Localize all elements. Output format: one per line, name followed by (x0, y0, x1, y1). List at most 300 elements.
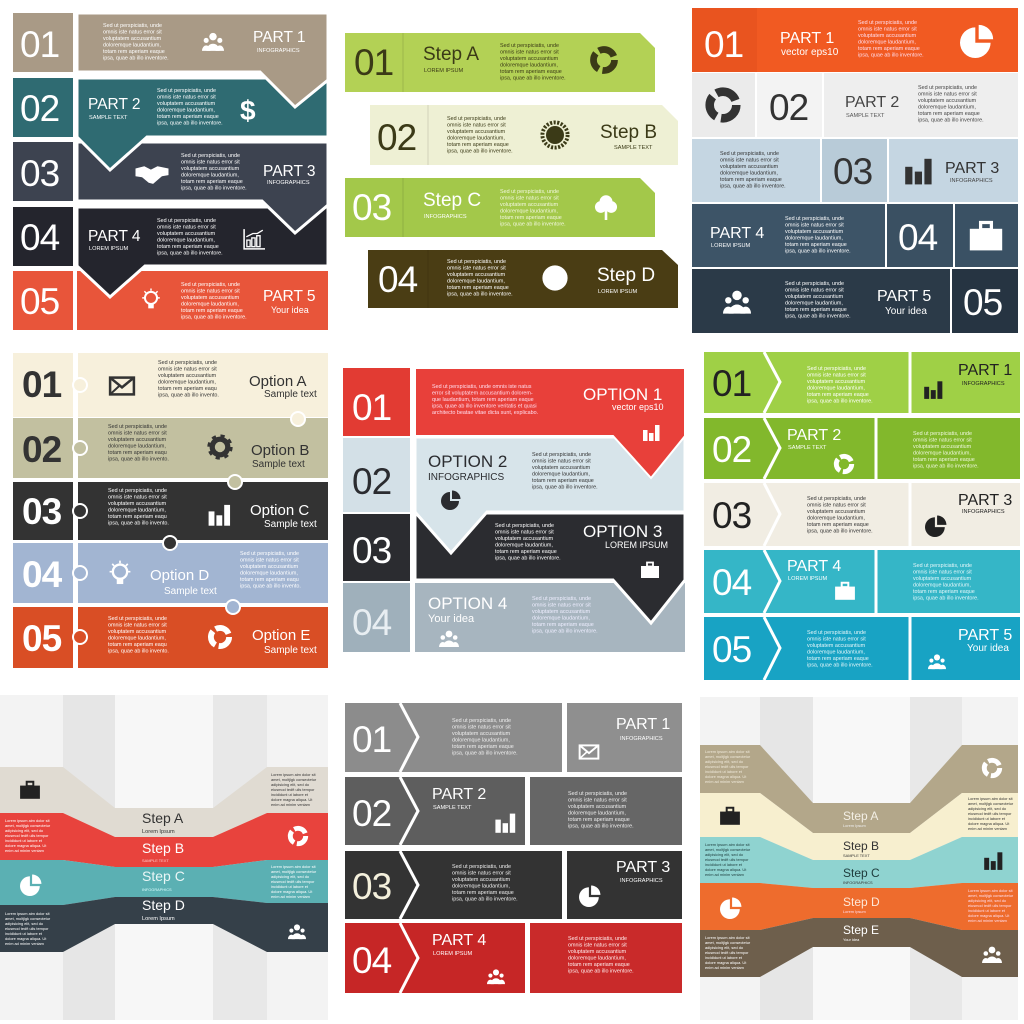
panel 1: parts 01-05 chevron rows: PART 1 (253, 29, 306, 46)
panel 2: steps A-D tags: doloremque laudantium, (447, 136, 505, 142)
panel 9: folded steps A-E: Lorem Ipsum (843, 909, 866, 914)
panel 8: gray parts 01-04: 02 (352, 793, 391, 834)
panel 6: chevron parts 01-05: doloremque laudantium, (913, 582, 971, 588)
panel 1: parts 01-05 chevron rows: totam rem aperiam eaque (157, 114, 219, 120)
panel 9: folded steps A-E: adipisicing elit, sed do (968, 806, 1006, 811)
panel 3: tiled parts grid: Sed ut perspiciatis, unde (918, 85, 977, 91)
panel 4: puzzle options A-E: doloremque laudantium, (108, 508, 166, 514)
panel 2: steps A-D tags: voluptatem accusantium (447, 129, 506, 135)
panel 4: puzzle options A-E: voluptatem accusantium (108, 629, 167, 635)
panel 2: steps A-D tags: Sed ut perspiciatis, unde (500, 43, 559, 49)
panel 3: tiled parts grid: ipsa, quae ab illo inventore. (858, 52, 924, 58)
panel 3: tiled parts grid: Sed ut perspiciatis, unde (858, 20, 917, 26)
panel 1: parts 01-05 chevron rows: totam rem aperiam eaque (181, 308, 243, 314)
panel 1: parts 01-05 chevron rows: Sed ut perspiciatis, unde (103, 23, 162, 29)
panel 2: steps A-D tags: doloremque laudantium, (500, 62, 558, 68)
panel 6: chevron parts 01-05: omnis iste natus error sit (913, 570, 972, 576)
panel 7: folded steps A-D: enim ad minim veniam (5, 941, 44, 946)
panel 5: options 1-4 with V notches (343, 368, 685, 652)
panel 7: folded steps A-D: adipisicing elit, sed do (5, 921, 43, 926)
panel 4: puzzle options A-E (13, 353, 328, 668)
panel 5: options 1-4 with V notches: doloremque laudantium, (532, 616, 590, 622)
panel 7: folded steps A-D: Step D (142, 897, 185, 913)
panel 2: steps A-D tags: omnis iste natus error sit (447, 266, 506, 272)
panel 6: chevron parts 01-05: voluptatem accusantium (807, 379, 866, 385)
panel 4: puzzle options A-E: voluptatem accusantium (240, 564, 299, 570)
panel 6: chevron parts 01-05: totam rem aperiam eaque (913, 589, 975, 595)
panel 4: puzzle options A-E: 03 (22, 491, 62, 532)
panel 3: tiled parts grid: PART 5 (877, 288, 931, 305)
panel 6: chevron parts 01-05: Sed ut perspiciatis, unde (807, 630, 866, 636)
panel 3: tiled parts grid: doloremque laudantium, (720, 170, 778, 176)
panel 3: tiled parts grid: vector eps10 (781, 47, 839, 58)
panel 4: puzzle options A-E: Sed ut perspiciatis, unde (108, 616, 167, 622)
panel 8: gray parts 01-04: PART 3 (616, 859, 670, 876)
panel 7: folded steps A-D: dolore magna aliqua. Ut (5, 936, 47, 941)
panel 7: folded steps A-D: Lorem ipsum aim dolor sit (5, 911, 50, 916)
panel 3: tiled parts grid: PART 2 (845, 94, 899, 111)
panel 7: folded steps A-D: Lorem Ipsum (142, 916, 175, 922)
panel 8: gray parts 01-04: doloremque laudantium, (452, 884, 510, 890)
panel 1: parts 01-05 chevron rows: 05 (20, 281, 60, 322)
panel 2: steps A-D tags: ipsa, quae ab illo inventore. (500, 76, 566, 82)
panel 3: tiled parts grid: doloremque laudantium, (858, 40, 916, 46)
panel 4: puzzle options A-E: doloremque laudantium, (108, 636, 166, 642)
panel 5: options 1-4 with V notches: OPTION 3 (583, 522, 662, 541)
panel 2: steps A-D tags: Sed ut perspiciatis, unde (500, 189, 559, 195)
panel 4: puzzle options A-E: doloremque laudantium, (240, 570, 298, 576)
panel 5: options 1-4 with V notches: 02 (352, 461, 391, 502)
panel 4: puzzle options A-E: ipsa, quae ab illo invento. (108, 456, 169, 462)
panel 8: gray parts 01-04: omnis iste natus error sit (568, 798, 627, 804)
panel 2: steps A-D tags: totam rem aperiam eaque (500, 215, 562, 221)
panel 1: parts 01-05 chevron rows: totam rem aperiam eaque (157, 244, 219, 250)
panel 2: steps A-D tags: ipsa, quae ab illo inventore. (500, 222, 566, 228)
panel 7: folded steps A-D: Step C (142, 868, 185, 884)
panel 1: parts 01-05 chevron rows: omnis iste natus error sit (181, 288, 240, 294)
panel 6: chevron parts 01-05: doloremque laudantium, (913, 450, 971, 456)
panel 1: parts 01-05 chevron rows: omnis iste natus error sit (157, 94, 216, 100)
panel 9: folded steps A-E: eiusmod tedft ulls tempor (968, 811, 1012, 816)
panel 1: parts 01-05 chevron rows: omnis iste natus error sit (103, 30, 162, 36)
panel 9: folded steps A-E: amet, moltjlgk consectetur (705, 940, 751, 945)
panel 2: steps A-D tags: omnis iste natus error sit (447, 122, 506, 128)
panel 4: puzzle options A-E: omnis iste natus error sit (108, 622, 167, 628)
panel 8: gray parts 01-04: voluptatem accusantium (452, 877, 511, 883)
panel 6: chevron parts 01-05: totam rem aperiam eaque (913, 457, 975, 463)
panel 7: folded steps A-D: incididunt ut labore et (271, 884, 309, 889)
panel 1: parts 01-05 chevron rows: Sed ut perspiciatis, unde (157, 88, 216, 94)
panel 8: gray parts 01-04: PART 2 (432, 786, 486, 803)
panel 6: chevron parts 01-05: PART 1 (958, 362, 1012, 379)
panel 6: chevron parts 01-05: Sed ut perspiciatis, unde (913, 563, 972, 569)
panel 9: folded steps A-E: enim ad minim veniam (705, 779, 744, 784)
panel 5: options 1-4 with V notches: Your idea (428, 613, 475, 625)
panel 4: puzzle options A-E: ipsa, quae ab illo invento. (240, 584, 301, 590)
panel 4: puzzle options A-E: Sample text (252, 459, 305, 470)
panel 1: parts 01-05 chevron rows: doloremque laudantium, (157, 108, 215, 114)
panel 7: folded steps A-D: dolore magna aliqua. Ut (5, 843, 47, 848)
panel 6: chevron parts 01-05: 01 (712, 363, 751, 404)
panel 8: gray parts 01-04: omnis iste natus error sit (452, 870, 511, 876)
panel 2: steps A-D tags: LOREM IPSUM (424, 68, 464, 74)
panel 9: folded steps A-E: Step C (843, 866, 880, 880)
panel 4: puzzle options A-E: ipsa, quae ab illo invento. (158, 392, 219, 398)
panel 4: puzzle options A-E: Option D (150, 567, 209, 584)
panel 7: folded steps A-D: incididunt ut labore et (271, 792, 309, 797)
panel 9: folded steps A-E: Lorem ipsum aim dolor sit (705, 749, 750, 754)
panel 7: folded steps A-D (0, 695, 328, 1020)
panel 2: steps A-D tags: voluptatem accusantium (447, 272, 506, 278)
panel 6: chevron parts 01-05: ipsa, quae ab illo inventore. (913, 464, 979, 470)
panel 4: puzzle options A-E: omnis iste natus error sit (240, 558, 299, 564)
panel 4: puzzle options A-E: totam rem aperiam eaqu (108, 642, 167, 648)
panel 8: gray parts 01-04: PART 4 (432, 932, 486, 949)
panel 4: puzzle options A-E: Option E (252, 627, 310, 644)
panel 7: folded steps A-D: Step A (142, 810, 184, 826)
panel 6: chevron parts 01-05: voluptatem accusantium (913, 576, 972, 582)
panel 6: chevron parts 01-05: 05 (712, 629, 752, 670)
panel 9: folded steps A-E: Lorem ipsum aim dolor sit (705, 935, 750, 940)
panel 4: puzzle options A-E: Sample text (264, 645, 317, 656)
panel 9: folded steps A-E: adipisicing elit, sed do (705, 945, 743, 950)
panel 9: folded steps A-E: adipisicing elit, sed do (968, 898, 1006, 903)
panel 2: steps A-D tags: SAMPLE TEXT (614, 145, 653, 151)
panel 3: tiled parts grid: ipsa, quae ab illo inventore. (785, 314, 851, 320)
panel 1: parts 01-05 chevron rows: 01 (20, 24, 59, 65)
panel 1: parts 01-05 chevron rows: totam rem aperiam eaque (103, 49, 165, 55)
panel 9: folded steps A-E: eiusmod tedft ulls tempor (705, 764, 749, 769)
panel 8: gray parts 01-04: 04 (352, 940, 392, 981)
panel 3: tiled parts grid: voluptatem accusantium (785, 294, 844, 300)
panel 5: options 1-4 with V notches: Sed ut perspiciatis, unde (532, 596, 591, 602)
panel 2: steps A-D tags: 04 (378, 259, 418, 300)
panel 4: puzzle options A-E: doloremque laudantium, (108, 444, 166, 450)
panel 7: folded steps A-D: incididunt ut labore et (5, 838, 43, 843)
panel 3: tiled parts grid: PART 1 (780, 30, 834, 47)
panel 3: tiled parts grid: voluptatem accusantium (858, 33, 917, 39)
panel 2: steps A-D tags: ipsa, quae ab illo inventore. (447, 148, 513, 154)
panel 6: chevron parts 01-05: LOREM IPSUM (788, 576, 828, 582)
panel 5: options 1-4 with V notches: doloremque laudantium, (532, 472, 590, 478)
panel 9: folded steps A-E: adipisicing elit, sed do (705, 759, 743, 764)
panel 8: gray parts 01-04: INFOGRAPHICS (620, 736, 663, 742)
panel 6: chevron parts 01-05: 02 (712, 429, 751, 470)
panel 2: steps A-D tags: LOREM IPSUM (598, 289, 638, 295)
panel 3: tiled parts grid: PART 4 (710, 225, 764, 242)
panel 9: folded steps A-E: Step B (843, 839, 879, 853)
panel 9: folded steps A-E: dolore magna aliqua. Ut (968, 913, 1010, 918)
panel 7: folded steps A-D: enim ad minim veniam (271, 894, 310, 899)
panel 2: steps A-D tags: Step D (597, 265, 655, 286)
panel 9: folded steps A-E: amet, moltjlgk consectetur (968, 801, 1014, 806)
panel 4: puzzle options A-E: 04 (22, 554, 63, 595)
panel 1: parts 01-05 chevron rows: doloremque laudantium, (157, 238, 215, 244)
panel 1: parts 01-05 chevron rows: voluptatem accusantium (181, 295, 240, 301)
panel 9: folded steps A-E: incididunt ut labore et (968, 908, 1006, 913)
panel 3: tiled parts grid: doloremque laudantium, (785, 300, 843, 306)
panel 3: tiled parts grid: doloremque laudantium, (785, 236, 843, 242)
panel 1: parts 01-05 chevron rows: totam rem aperiam eaque (181, 179, 243, 185)
panel 2: steps A-D tags: Sed ut perspiciatis, unde (447, 259, 506, 265)
panel 2: steps A-D tags: totam rem aperiam eaque (500, 69, 562, 75)
panel 6: chevron parts 01-05: voluptatem accusantium (807, 643, 866, 649)
panel 6: chevron parts 01-05: PART 2 (787, 427, 841, 444)
panel 9: folded steps A-E: adipisicing elit, sed do (705, 852, 743, 857)
panel 8: gray parts 01-04: Sed ut perspiciatis, unde (568, 791, 627, 797)
panel 1: parts 01-05 chevron rows: 04 (20, 217, 60, 258)
panel 8: gray parts 01-04: ipsa, quae ab illo inventore. (452, 750, 518, 756)
panel 6: chevron parts 01-05: Sed ut perspiciatis, unde (913, 431, 972, 437)
panel 8: gray parts 01-04: ipsa, quae ab illo inventore. (568, 968, 634, 974)
panel 2: steps A-D tags: omnis iste natus error sit (500, 50, 559, 56)
panel 5: options 1-4 with V notches: 04 (352, 602, 392, 643)
panel 4: puzzle options A-E: doloremque laudantium, (158, 380, 216, 386)
panel 4: puzzle options A-E: omnis iste natus error sit (108, 494, 167, 500)
panel 9: folded steps A-E: amet, moltjlgk consectetur (705, 754, 751, 759)
panel 7: folded steps A-D: enim ad minim veniam (271, 802, 310, 807)
panel 2: steps A-D tags: Sed ut perspiciatis, unde (447, 116, 506, 122)
panel 9: folded steps A-E: eiusmod tedft ulls tempor (705, 950, 749, 955)
panel 5: options 1-4 with V notches: error sit voluptatem accusantium dolorem- (432, 390, 533, 396)
panel 6: chevron parts 01-05: ipsa, quae ab illo inventore. (807, 662, 873, 668)
panel 9: folded steps A-E: Step A (843, 809, 878, 823)
panel 1: parts 01-05 chevron rows: ipsa, quae ab illo inventore. (181, 186, 247, 192)
panel 3: tiled parts grid: 02 (769, 87, 808, 128)
panel 5: options 1-4 with V notches: 01 (352, 387, 391, 428)
panel 7: folded steps A-D: Lorem ipsum aim dolor sit (271, 864, 316, 869)
panel 7: folded steps A-D: Lorem ipsum aim dolor sit (271, 772, 316, 777)
panel 5: options 1-4 with V notches: doloremque laudantium, (495, 542, 553, 548)
panel 6: chevron parts 01-05 (704, 352, 1020, 680)
panel 1: parts 01-05 chevron rows: doloremque laudantium, (103, 42, 161, 48)
panel 6: chevron parts 01-05: totam rem aperiam eaque (807, 392, 869, 398)
panel 8: gray parts 01-04: voluptatem accusantium (568, 804, 627, 810)
panel 4: puzzle options A-E: totam rem aperiam eaqu (158, 386, 217, 392)
panel 9: folded steps A-E: Step D (843, 895, 880, 909)
panel 5: options 1-4 with V notches: vector eps10 (612, 402, 664, 412)
panel 8: gray parts 01-04: Sed ut perspiciatis, unde (452, 718, 511, 724)
panel 4: puzzle options A-E: Sample text (164, 586, 217, 597)
panel 5: options 1-4 with V notches: OPTION 4 (428, 594, 507, 613)
panel 9: folded steps A-E: incididunt ut labore et (968, 816, 1006, 821)
panel 4: puzzle options A-E: Sed ut perspiciatis, unde (158, 360, 217, 366)
panel 3: tiled parts grid: 04 (898, 217, 938, 258)
panel 4: puzzle options A-E: 02 (22, 429, 62, 470)
panel 6: chevron parts 01-05: doloremque laudantium, (807, 650, 865, 656)
panel 4: puzzle options A-E: Sample text (264, 519, 317, 530)
panel 8: gray parts 01-04: SAMPLE TEXT (433, 805, 472, 811)
panel 5: options 1-4 with V notches: ipsa, quae ab illo inventore. (532, 628, 598, 634)
panel 8: gray parts 01-04: Sed ut perspiciatis, unde (568, 936, 627, 942)
panel 5: options 1-4 with V notches: totam rem aperiam eaque (532, 478, 594, 484)
panel 7: folded steps A-D: eiusmod tedft ulls tempor (5, 926, 49, 931)
panel 8: gray parts 01-04: Sed ut perspiciatis, unde (452, 864, 511, 870)
panel 7: folded steps A-D: amet, moltjlgk consectetur (5, 916, 51, 921)
panel 8: gray parts 01-04: 03 (352, 866, 391, 907)
panel 3: tiled parts grid: voluptatem accusantium (918, 98, 977, 104)
panel 5: options 1-4 with V notches: totam rem aperiam eaque (495, 549, 557, 555)
panel 8: gray parts 01-04: totam rem aperiam eaque (568, 962, 630, 968)
panel 9: folded steps A-E: incididunt ut labore et (705, 769, 743, 774)
panel 2: steps A-D tags: ipsa, quae ab illo inventore. (447, 292, 513, 298)
panel 7: folded steps A-D: adipisicing elit, sed do (271, 874, 309, 879)
panel 3: tiled parts grid: totam rem aperiam eaque (720, 177, 782, 183)
panel 6: chevron parts 01-05: INFOGRAPHICS (962, 509, 1005, 515)
panel 3: tiled parts grid: 03 (833, 151, 872, 192)
panel 7: folded steps A-D: eiusmod tedft ulls tempor (5, 833, 49, 838)
panel 6: chevron parts 01-05: doloremque laudantium, (807, 386, 865, 392)
panel 5: options 1-4 with V notches: architecto beatae vitae dicta sunt, explicabo. (432, 410, 538, 416)
panel 9: folded steps A-E: enim ad minim veniam (968, 918, 1007, 923)
panel 1: parts 01-05 chevron rows: 02 (20, 88, 59, 129)
panel 8: gray parts 01-04 (345, 703, 682, 993)
panel 6: chevron parts 01-05: ipsa, quae ab illo inventore. (807, 398, 873, 404)
panel 9: folded steps A-E: incididunt ut labore et (705, 862, 743, 867)
panel 9: folded steps A-E: Your idea (843, 937, 860, 942)
panel 7: folded steps A-D: incididunt ut labore et (5, 931, 43, 936)
panel 1: parts 01-05 chevron rows: PART 4 (88, 228, 141, 245)
panel 3: tiled parts grid: omnis iste natus error sit (720, 158, 779, 164)
panel 2: steps A-D tags: 03 (352, 187, 391, 228)
panel 3: tiled parts grid (692, 8, 1018, 333)
panel 5: options 1-4 with V notches: ipsa, quae ab illo inventore veritatis et quasi (432, 404, 537, 410)
panel 9: folded steps A-E: Lorem ipsum aim dolor sit (705, 842, 750, 847)
panel 5: options 1-4 with V notches: omnis iste natus error sit (495, 530, 554, 536)
panel 9: folded steps A-E: SAMPLE TEXT (843, 853, 870, 858)
panel 6: chevron parts 01-05: ipsa, quae ab illo inventore. (807, 528, 873, 534)
panel 6: chevron parts 01-05: voluptatem accusantium (807, 509, 866, 515)
panel 7: folded steps A-D: eiusmod tedft ulls tempor (271, 879, 315, 884)
panel 7: folded steps A-D: SAMPLE TEXT (142, 858, 169, 863)
panel 9: folded steps A-E: eiusmod tedft ulls tempor (705, 857, 749, 862)
panel 7: folded steps A-D: Lorem ipsum aim dolor sit (5, 818, 50, 823)
panel 8: gray parts 01-04: totam rem aperiam eaque (452, 744, 514, 750)
panel 3: tiled parts grid: omnis iste natus error sit (785, 288, 844, 294)
panel 5: options 1-4 with V notches: omnis iste natus error sit (532, 602, 591, 608)
panel 5: options 1-4 with V notches: ipsa, quae ab illo inventore. (532, 484, 598, 490)
panel 3: tiled parts grid: ipsa, quae ab illo inventore. (785, 248, 851, 254)
panel 6: chevron parts 01-05: SAMPLE TEXT (788, 445, 827, 451)
panel 4: puzzle options A-E: totam rem aperiam eaqu (240, 577, 299, 583)
panel 3: tiled parts grid: INFOGRAPHICS (950, 178, 993, 184)
panel 5: options 1-4 with V notches: Sed ut perspiciatis, unde omnis iste natus (432, 384, 532, 390)
panel 7: folded steps A-D: dolore magna aliqua. Ut (271, 889, 313, 894)
panel 8: gray parts 01-04: doloremque laudantium, (452, 738, 510, 744)
panel 8: gray parts 01-04: 01 (352, 719, 391, 760)
panel 1: parts 01-05 chevron rows: SAMPLE TEXT (89, 115, 128, 121)
panel 2: steps A-D tags: omnis iste natus error sit (500, 196, 559, 202)
panel 1: parts 01-05 chevron rows: omnis iste natus error sit (157, 224, 216, 230)
panel 8: gray parts 01-04: PART 1 (616, 716, 670, 733)
panel 5: options 1-4 with V notches: 03 (352, 530, 391, 571)
panel 2: steps A-D tags: doloremque laudantium, (447, 278, 505, 284)
panel 1: parts 01-05 chevron rows: doloremque laudantium, (181, 302, 239, 308)
panel 3: tiled parts grid: totam rem aperiam eaque (785, 242, 847, 248)
panel 9: folded steps A-E: enim ad minim veniam (968, 826, 1007, 831)
panel 1: parts 01-05 chevron rows: doloremque laudantium, (181, 172, 239, 178)
panel 7: folded steps A-D: enim ad minim veniam (5, 848, 44, 853)
panel 5: options 1-4 with V notches: OPTION 1 (583, 385, 662, 404)
panel 4: puzzle options A-E: Option B (251, 442, 309, 459)
panel 3: tiled parts grid: Sed ut perspiciatis, unde (720, 151, 779, 157)
panel 3: tiled parts grid: totam rem aperiam eaque (858, 46, 920, 52)
panel 9: folded steps A-E: INFOGRAPHICS (843, 880, 873, 885)
panel 5: options 1-4 with V notches: voluptatem accusantium (532, 609, 591, 615)
panel 8: gray parts 01-04: ipsa, quae ab illo inventore. (452, 896, 518, 902)
panel 4: puzzle options A-E: totam rem aperiam eaqu (108, 514, 167, 520)
panel 6: chevron parts 01-05: totam rem aperiam eaque (807, 522, 869, 528)
panel 1: parts 01-05 chevron rows: Sed ut perspiciatis, unde (181, 153, 240, 159)
panel 9: folded steps A-E: amet, moltjlgk consectetur (968, 893, 1014, 898)
panel 2: steps A-D tags: Step B (600, 122, 657, 143)
panel 3: tiled parts grid: omnis iste natus error sit (918, 92, 977, 98)
panel 5: options 1-4 with V notches: voluptatem accusantium (495, 536, 554, 542)
panel 9: folded steps A-E: amet, moltjlgk consectetur (705, 847, 751, 852)
panel 1: parts 01-05 chevron rows: PART 3 (263, 163, 316, 180)
panel 4: puzzle options A-E: Sed ut perspiciatis, unde (108, 488, 167, 494)
panel 9: folded steps A-E (700, 697, 1018, 1020)
panel 1: parts 01-05 chevron rows: Sed ut perspiciatis, unde (181, 282, 240, 288)
panel 1: parts 01-05 chevron rows: Sed ut perspiciatis, unde (157, 218, 216, 224)
panel 6: chevron parts 01-05: PART 5 (958, 627, 1012, 644)
panel 3: tiled parts grid: totam rem aperiam eaque (785, 307, 847, 313)
panel 6: chevron parts 01-05: voluptatem accusantium (913, 444, 972, 450)
panel 6: chevron parts 01-05: Sed ut perspiciatis, unde (807, 366, 866, 372)
panel 5: options 1-4 with V notches: que laudantium, totam rem aperiam eaque (432, 397, 534, 403)
panel 8: gray parts 01-04: voluptatem accusantium (452, 731, 511, 737)
panel 2: steps A-D tags: INFOGRAPHICS (424, 214, 467, 220)
panel 6: chevron parts 01-05: Sed ut perspiciatis, unde (807, 496, 866, 502)
panel 1: parts 01-05 chevron rows: INFOGRAPHICS (257, 48, 300, 54)
panel 2: steps A-D tags (345, 33, 678, 308)
panel 6: chevron parts 01-05: 03 (712, 495, 751, 536)
panel 7: folded steps A-D: Lorem Ipsum (142, 829, 175, 835)
panel 2: steps A-D tags: voluptatem accusantium (500, 56, 559, 62)
panel 1: parts 01-05 chevron rows: $ (240, 95, 256, 126)
panel 4: puzzle options A-E: 05 (22, 618, 62, 659)
panel 7: folded steps A-D: eiusmod tedft ulls tempor (271, 787, 315, 792)
panel 4: puzzle options A-E: Sample text (264, 389, 317, 400)
panel 3: tiled parts grid: Sed ut perspiciatis, unde (785, 281, 844, 287)
panel 7: folded steps A-D: amet, moltjlgk consectetur (271, 777, 317, 782)
panel 4: puzzle options A-E: ipsa, quae ab illo invento. (108, 648, 169, 654)
panel 1: parts 01-05 chevron rows: ipsa, quae ab illo inventore. (157, 120, 223, 126)
panel 9: folded steps A-E: dolore magna aliqua. Ut (705, 960, 747, 965)
panel 8: gray parts 01-04: omnis iste natus error sit (452, 724, 511, 730)
panel 6: chevron parts 01-05: omnis iste natus error sit (807, 636, 866, 642)
panel 1: parts 01-05 chevron rows: ipsa, quae ab illo inventore. (157, 250, 223, 256)
panel 3: tiled parts grid: SAMPLE TEXT (846, 113, 885, 119)
panel 4: puzzle options A-E: voluptatem accusantium (108, 437, 167, 443)
panel 1: parts 01-05 chevron rows (13, 13, 328, 330)
panel 9: folded steps A-E: dolore magna aliqua. Ut (705, 867, 747, 872)
panel 3: tiled parts grid: Your idea (885, 306, 927, 317)
panel 5: options 1-4 with V notches: omnis iste natus error sit (532, 458, 591, 464)
panel 1: parts 01-05 chevron rows: ipsa, quae ab illo inventore. (181, 314, 247, 320)
panel 5: options 1-4 with V notches: voluptatem accusantium (532, 465, 591, 471)
panel 6: chevron parts 01-05: omnis iste natus error sit (807, 372, 866, 378)
panel 2: steps A-D tags: 01 (354, 42, 393, 83)
panel 1: parts 01-05 chevron rows: LOREM IPSUM (89, 246, 129, 252)
panel 5: options 1-4 with V notches: OPTION 2 (428, 452, 507, 471)
panel 3: tiled parts grid: ipsa, quae ab illo inventore. (720, 184, 786, 190)
panel 1: parts 01-05 chevron rows: voluptatem accusantium (157, 231, 216, 237)
panel 6: chevron parts 01-05: omnis iste natus error sit (913, 438, 972, 444)
panel 3: tiled parts grid: LOREM IPSUM (711, 243, 751, 249)
panel 4: puzzle options A-E: omnis iste natus error sit (108, 430, 167, 436)
panel 7: folded steps A-D: INFOGRAPHICS (142, 887, 172, 892)
